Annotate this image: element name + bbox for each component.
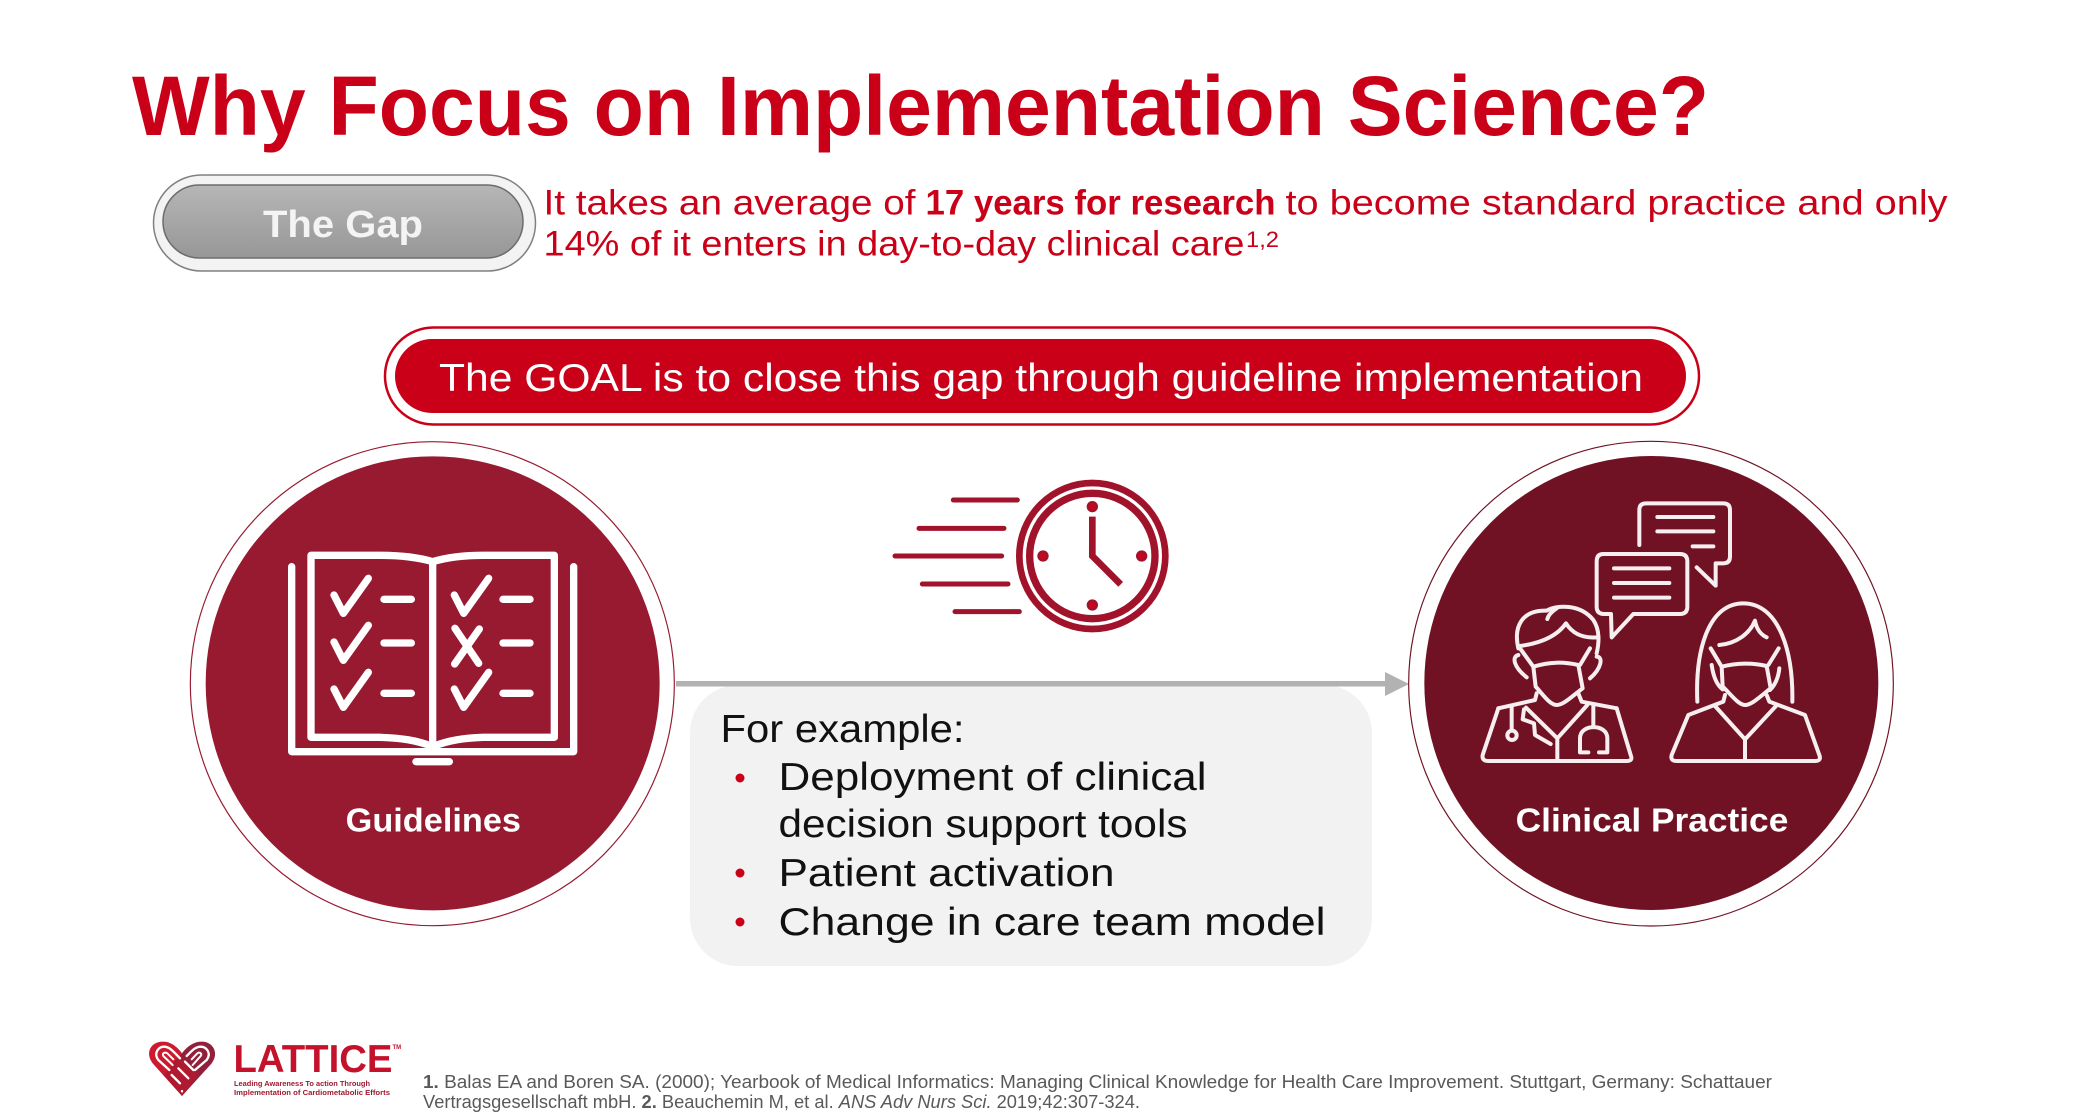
logo: LATTICE bbox=[149, 1038, 401, 1097]
panel: example box: Patient activation bbox=[778, 852, 1114, 895]
panel: clinical practice circle bbox=[1409, 441, 1893, 926]
gap statement text: It takes an average of bbox=[544, 184, 916, 222]
gap statement text bbox=[544, 184, 1948, 264]
icon: open book checklist bbox=[292, 555, 574, 762]
references footnote: 1. Balas EA and Boren SA. (2000); Yearbook of Medical Informatics: Managing Clinical Knowledge for Health Care Improvement. Stuttgart, Germany: Schattauer bbox=[423, 1072, 1772, 1092]
icon: clinicians with speech bubbles bbox=[1483, 503, 1820, 761]
references footnote: Vertragsgesellschaft mbH. 2. Beauchemin M, et al. ANS Adv Nurs Sci. 2019;42:307-324. bbox=[423, 1092, 1140, 1112]
The Gap pill: The Gap bbox=[263, 204, 423, 246]
goal banner bbox=[385, 328, 1699, 424]
references footnote bbox=[423, 1072, 1772, 1112]
arrow: guidelines to clinical practice bbox=[676, 672, 1409, 696]
gap statement text: 14% of it enters in day-to-day clinical care bbox=[544, 224, 1244, 264]
panel: example box: Deployment of clinical bbox=[778, 756, 1206, 799]
logo: LATTICE: Leading Awareness To action Through bbox=[234, 1079, 370, 1088]
title: Why Focus on Implementation Science? bbox=[132, 59, 1709, 153]
icon: woven heart bbox=[149, 1042, 215, 1096]
gap statement text: to become standard practice and only bbox=[1286, 184, 1948, 222]
goal banner: The GOAL is to close this gap through guideline implementation bbox=[439, 357, 1643, 400]
panel: guidelines circle bbox=[190, 442, 674, 926]
label: Guidelines: Guidelines bbox=[346, 803, 521, 840]
gap statement text: 17 years for research bbox=[926, 184, 1276, 222]
The Gap pill bbox=[154, 175, 536, 271]
panel: example box: Change in care team model bbox=[778, 901, 1326, 944]
logo: LATTICE: Implementation of Cardiometabolic Efforts bbox=[234, 1088, 390, 1097]
icon: fast clock bbox=[895, 483, 1165, 629]
gap statement text: 1,2 bbox=[1246, 227, 1279, 252]
panel: example box: decision support tools bbox=[778, 803, 1188, 846]
panel: example box bbox=[690, 685, 1372, 966]
label: Clinical Practice: Clinical Practice bbox=[1516, 803, 1788, 840]
logo: LATTICE: LATTICE bbox=[234, 1038, 392, 1081]
logo: LATTICE: TM bbox=[392, 1045, 401, 1051]
panel: example box: For example: bbox=[720, 708, 964, 751]
